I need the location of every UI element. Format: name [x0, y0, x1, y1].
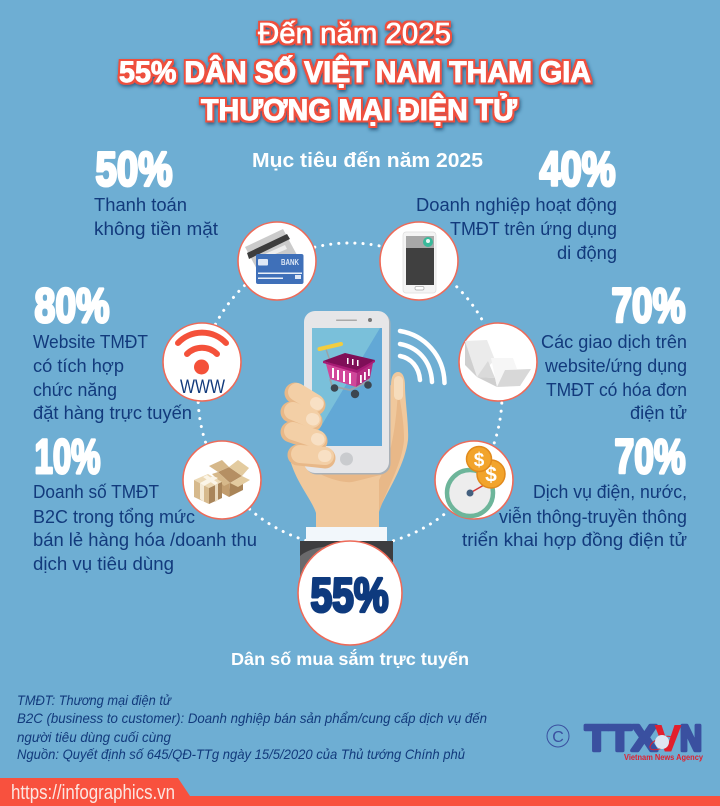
stat: utilities contracts 70%: triển khai hợp đồng điện tử — [462, 529, 687, 550]
shirt cuff — [306, 527, 387, 542]
logo: TTXVN: N — [680, 718, 702, 758]
stat: website ordering 80%: Website TMĐT — [33, 331, 148, 352]
stat: e-invoice 70% — [541, 280, 687, 423]
stat: mobile apps 40%: Doanh nghiệp hoạt động — [416, 194, 617, 215]
stat: e-invoice 70%: điện tử — [630, 402, 687, 423]
caption: online shoppers: Dân số mua sắm trực tuyến — [231, 648, 469, 669]
stat: cashless 50%: Thanh toán — [94, 194, 187, 215]
stat: utilities contracts 70%: 70% — [614, 431, 686, 484]
logo: TTXVN — [585, 718, 703, 762]
footer band with URL: https://infographics.vn — [11, 782, 175, 804]
subtitle: targets: Mục tiêu đến năm 2025 — [252, 150, 483, 172]
icon: wifi www — [163, 323, 241, 401]
phone — [304, 311, 390, 474]
footer band with URL — [0, 778, 720, 806]
icon: bank cards: BANK — [281, 258, 299, 267]
stat: B2C revenue 10%: 10% — [34, 431, 100, 484]
stat: website ordering 80% — [33, 280, 192, 423]
icon: cardboard boxes — [183, 441, 261, 519]
stat: utilities contracts 70% — [462, 431, 687, 550]
stat: website ordering 80%: chức năng — [33, 379, 117, 400]
title — [119, 18, 591, 127]
stat: B2C revenue 10%: bán lẻ hàng hóa /doanh thu — [33, 529, 257, 550]
title: Đến năm 2025 — [258, 18, 451, 50]
title: 55% DÂN SỐ VIỆT NAM THAM GIA — [119, 55, 591, 89]
icon: e-invoice paper — [459, 323, 537, 401]
logo: TTXVN: TTX — [585, 718, 657, 758]
footnotes: người tiêu dùng cuối cùng — [17, 729, 171, 745]
stat: e-invoice 70%: 70% — [612, 280, 686, 333]
stat: cashless 50% — [94, 144, 218, 239]
stat: e-invoice 70%: TMĐT có hóa đơn — [546, 379, 687, 400]
copyright symbol: C — [552, 729, 564, 746]
dotted ring — [198, 243, 502, 547]
stat: mobile apps 40%: di động — [557, 242, 617, 263]
logo: TTXVN: V — [655, 718, 681, 759]
stat: mobile apps 40%: TMĐT trên ứng dụng — [450, 218, 617, 239]
stat: website ordering 80%: có tích hợp — [33, 355, 124, 376]
icon: gauge and coins: $ — [485, 464, 497, 486]
stat: utilities contracts 70%: Dịch vụ điện, nước, — [533, 481, 687, 502]
hand: fingers — [291, 392, 326, 458]
stat: website ordering 80%: 80% — [34, 280, 110, 333]
logo: TTXVN: Vietnam News Agency — [624, 752, 703, 762]
stat: mobile apps 40%: 40% — [540, 144, 616, 196]
hand: palm and wrist — [291, 372, 408, 528]
icon: bank cards — [238, 222, 316, 300]
stat: B2C revenue 10%: Doanh số TMĐT — [33, 481, 159, 502]
footnotes: TMĐT: Thương mại điện tử — [17, 692, 172, 708]
stat: cashless 50%: 50% — [96, 144, 172, 196]
icon: shopping cart — [320, 344, 375, 398]
stat: B2C revenue 10%: B2C trong tổng mức — [33, 506, 195, 527]
stat: B2C revenue 10% — [33, 431, 257, 574]
icon: mobile app — [380, 222, 458, 300]
icon: gauge and coins — [435, 441, 513, 519]
hand holding phone — [291, 311, 408, 528]
stat: mobile apps 40% — [416, 144, 617, 263]
stat: e-invoice 70%: website/ứng dụng — [544, 355, 687, 376]
stat: website ordering 80%: đặt hàng trực tuyến — [33, 402, 192, 423]
copyright symbol — [547, 725, 569, 747]
center circle: 55% — [298, 541, 402, 645]
stat: cashless 50%: không tiền mặt — [94, 218, 218, 239]
footnotes: Nguồn: Quyết định số 645/QĐ-TTg ngày 15/5/2020 của Thủ tướng Chính phủ — [17, 746, 465, 762]
icon: gauge and coins: $ — [474, 450, 485, 471]
icon: wifi www: WWW — [180, 377, 225, 398]
stat: utilities contracts 70%: viễn thông-truyền thông — [499, 506, 687, 527]
stat: B2C revenue 10%: dịch vụ tiêu dùng — [33, 553, 174, 574]
footnotes: B2C (business to customer): Doanh nghiệp bán sản phẩm/cung cấp dịch vụ đến — [17, 710, 487, 726]
stat: e-invoice 70%: Các giao dịch trên — [541, 331, 687, 352]
icon: wireless signal arcs — [400, 331, 444, 383]
footnotes — [17, 692, 487, 762]
center circle: 55%: 55% — [310, 570, 388, 622]
jacket sleeve — [300, 541, 393, 580]
title: THƯƠNG MẠI ĐIỆN TỬ — [201, 93, 517, 127]
